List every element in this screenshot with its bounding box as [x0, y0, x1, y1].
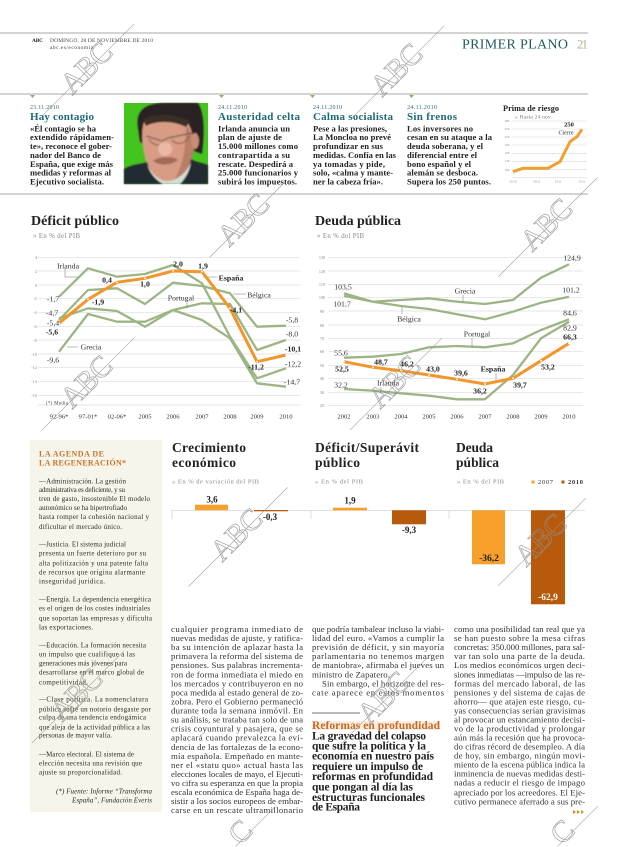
chart: Deuda pública: 101,7 [333, 300, 351, 308]
sidebar: La agenda de la regeneración: administrativa es deficiente, y su [39, 486, 126, 494]
bar chart: Deuda pública 2007 vs 2010: -62,9 [538, 593, 558, 603]
chart: Deuda pública: 84,6 [563, 308, 577, 318]
chart: Déficit público: 2006 [166, 414, 180, 420]
sidebar: La agenda de la regeneración: elección necesita una revisión que [39, 760, 142, 768]
chart: Déficit público: Déficit público [31, 214, 119, 229]
article text column 2: que podría tambalear incluso la viabi- [312, 624, 444, 634]
sidebar: La agenda de la regeneración: —Justicia. El sistema judicial [38, 540, 126, 548]
sidebar: La agenda de la regeneración: alta politización y una patente falta [39, 560, 149, 568]
news item: Calma socialista: La Moncloa no prevé [313, 132, 391, 142]
pull quote: Reformas en profundidad: La gravedad del colapso [312, 730, 426, 742]
sidebar: La agenda de la regeneración: desarrollarse en el marco global de [39, 668, 144, 676]
news item: Sin frenos: 24.11.2010 [407, 105, 437, 111]
bar chart section axis [172, 510, 585, 519]
mini chart: Prima de riesgo: 250 [564, 122, 574, 128]
mini chart: Prima de riesgo: Prima de riesgo [503, 104, 559, 113]
pull quote: Reformas en profundidad [312, 713, 441, 814]
sidebar: La agenda de la regeneración: culpa de una tendencia endogámica [39, 714, 147, 722]
news item: Austeridad celta: Irlanda anuncia un [218, 123, 290, 133]
article text column 1: zobra. Pero el Gobierno permaneció [171, 696, 304, 706]
bar chart: Crecimiento económico: económico [172, 455, 236, 470]
bar chart: Deuda pública 2007 vs 2010 [456, 440, 583, 604]
chart: Deuda pública: 48,7 [374, 358, 388, 366]
chart: Déficit público: Grecia [81, 342, 102, 352]
article text column 1: dencia de las fortalezas de la econo- [171, 742, 303, 752]
chart: Déficit público: -2 [33, 296, 37, 301]
mini chart: Prima de riesgo: 160 [505, 151, 510, 155]
news item: Calma socialista: Calma socialista [313, 111, 394, 123]
pull quote: Reformas en profundidad: Reformas en profundidad [312, 720, 441, 732]
news item: Calma socialista: ner la cabeza fría». [313, 176, 383, 186]
news item: Sin frenos: cesan en su ataque a la [407, 132, 493, 142]
sidebar: La agenda de la regeneración: pública sufre un notorio desgaste por [39, 706, 152, 714]
chart: Deuda pública: 60 [320, 349, 324, 354]
chart: Déficit público: -5,8 [286, 316, 298, 324]
article text column 2: cate aparece en estos momentos [312, 687, 445, 697]
chart: Deuda pública: 40 [320, 376, 324, 381]
article text column 2: Sin embargo, el horizonte del res- [322, 678, 444, 688]
chart: Deuda pública: 43,0 [426, 364, 440, 374]
chart: Déficit público: -8,0 [286, 330, 298, 338]
mini chart: Prima de riesgo: » Hasta 24 nov. [515, 114, 552, 120]
chart: Déficit público: 2005 [138, 414, 152, 420]
chart: Déficit público: -6 [33, 324, 37, 329]
chart: Deuda pública: 80 [320, 323, 324, 328]
sidebar: La agenda de la regeneración: —Clase política. La nomenclatura [38, 696, 149, 704]
article text column 1: elecciones locales de mayo, el Ejecuti- [171, 769, 303, 779]
article text column 3: yas consecuencias serían gravísimas [454, 705, 586, 715]
sidebar: La agenda de la regeneración: —Educación. La formación necesita [38, 642, 147, 650]
chart: Déficit público: 97-01* [79, 414, 97, 420]
news item: Austeridad celta: 15.000 millones como [218, 141, 298, 151]
news item: Austeridad celta: plan de ajuste de [218, 132, 282, 142]
chart: Deuda pública: Bélgica [397, 314, 421, 324]
mini chart: Prima de riesgo [503, 104, 587, 184]
sidebar: La agenda de la regeneración: que aleja de la actividad pública a las [39, 724, 150, 732]
sidebar: La agenda de la regeneración: competitividad. [39, 678, 88, 686]
sidebar: La agenda de la regeneración: autonómico se ha hipertrofiado [39, 504, 128, 512]
bar chart: Deuda pública 2007 vs 2010: » En % del PIB [457, 478, 505, 486]
chart: Deuda pública: 53,2 [541, 362, 555, 372]
chart: Deuda pública: 39,7 [513, 380, 527, 390]
article text column 1: crisis coyuntural y pasajera, que se [171, 724, 303, 734]
sidebar: La agenda de la regeneración: —Marco electoral. El sistema de [38, 750, 134, 758]
bar chart: Déficit/Superávit público: » En % del PIB [315, 478, 364, 486]
bar chart: Crecimiento económico: Crecimiento [172, 440, 246, 455]
bar chart: Deuda pública 2007 vs 2010: Deuda [456, 440, 493, 455]
sidebar: La agenda de la regeneración: —Administración. La gestión [38, 478, 126, 486]
news item: Calma socialista: medidas. Confía en las [313, 150, 397, 160]
chart: Deuda pública: 32,2 [334, 380, 348, 390]
sidebar: La agenda de la regeneración: las exportaciones. [39, 624, 93, 632]
article text column 3: do cifras récord de desempleo. A día [454, 741, 585, 751]
chart: Deuda pública: 2010 [562, 414, 576, 420]
chart: Deuda pública: 2005 [422, 414, 436, 420]
chart: Déficit público: -5,6 [46, 328, 58, 336]
article text column 3: de hoy, sin embargo, ningún movi- [454, 751, 585, 761]
article text column 1: carse en un rescate ultramillonario [171, 805, 304, 815]
news item: Hay contagio: extendido rápidamen- [30, 132, 114, 142]
chart: Déficit público: -4,1 [230, 306, 242, 314]
pull quote: Reformas en profundidad: requiere un impulso de [312, 761, 423, 773]
news item: Hay contagio: Ejecutivo socialista. [30, 176, 104, 186]
chart: Déficit público: 02-06* [108, 414, 126, 420]
chart: Deuda pública: 2007 [478, 414, 492, 420]
news item: Sin frenos: bono español y el [407, 159, 472, 169]
news item: Hay contagio: nador del Banco de [30, 150, 101, 160]
chart: Déficit público: 0,4 [102, 276, 112, 284]
article text column 3: vo de la productividad y prolongar [454, 723, 585, 733]
sidebar: La agenda de la regeneración: generaciones más jóvenes para [39, 660, 128, 668]
news item: Sin frenos [407, 105, 493, 186]
bar chart: Déficit/Superávit público: -9,3 [402, 525, 417, 535]
chart: Deuda pública: 2002 [337, 414, 351, 420]
chart: Déficit público: España [219, 274, 243, 282]
ABC watermark stamps: ABC [362, 350, 427, 415]
ABC watermark stamps: ABC [364, 38, 429, 103]
article text column 1: escala económica de España haga de- [171, 787, 303, 797]
chart: Déficit público: 2008 [223, 414, 237, 420]
sidebar: La agenda de la regeneración: es el origen de los costes industriales [39, 604, 150, 612]
article text column 3: apreciado por los acreedores. El Eje- [454, 787, 585, 797]
news item: Sin frenos: Los inversores no [407, 123, 473, 133]
sidebar: La agenda de la regeneración: dificultar el mercado único. [39, 523, 122, 531]
chart: Déficit público: 0 [35, 283, 37, 288]
news item: Austeridad celta: contrapartida a su [218, 150, 290, 160]
article text column 1: su análisis, se trataba tan solo de una [171, 715, 303, 725]
chart: Déficit público: » En % del PIB [33, 233, 80, 240]
article text column 2 [312, 624, 445, 697]
pull quote: Reformas en profundidad: estructuras funcionales [312, 792, 426, 804]
ABC watermark stamps: ABC [514, 193, 579, 258]
article text column 1: mía española. Empeñado en mante- [171, 751, 303, 761]
article text column 2: previsión de déficit, y sin mayoría [312, 642, 444, 652]
chart: Deuda pública: España [481, 364, 505, 374]
article text column 3: ahorro— que atajen este riesgo, cu- [454, 696, 585, 706]
chart: Déficit público: 92-96* [50, 414, 68, 420]
sidebar: La agenda de la regeneración: un impulso que cualifique a las [39, 650, 135, 658]
chart: Deuda pública: 52,5 [335, 364, 349, 374]
article text column 1: durante toda la semana inmóvil. En [171, 706, 304, 716]
news item: Calma socialista: solo, «calma y mante- [313, 167, 393, 177]
bar chart: Crecimiento económico [172, 440, 288, 522]
article text column 3: nadas a reducir el riesgo de impago [454, 778, 586, 788]
ABC watermark stamps: ABC [44, 663, 109, 728]
article text column 2: lidad del euro. «Vamos a cumplir la [312, 633, 444, 643]
chart: Déficit público: -14 [31, 379, 38, 384]
article text column 1: primavera la reforma del sistema de [171, 651, 303, 661]
news item: Calma socialista [313, 105, 397, 186]
chart: Déficit público: -14,7 [284, 378, 300, 386]
page header: ABC [32, 38, 43, 44]
article text column 1: ba su intención de aplazar hasta la [171, 642, 303, 652]
article text column 3: cutivo permanece aferrado a sus pre- [454, 797, 585, 807]
chart: Déficit público: -12,2 [285, 360, 301, 368]
chart: Déficit público: 1,9 [198, 262, 208, 270]
article text column 1: ner el «statu quo» actual hasta las [171, 760, 304, 770]
article text column 1: aplacará cuando prevalezca la evi- [171, 733, 303, 743]
news item: Hay contagio: Hay contagio [30, 111, 94, 123]
chart: Déficit público: -9,6 [47, 356, 59, 364]
chart: Déficit público: -4 [33, 310, 38, 315]
sidebar: La agenda de la regeneración: España”, Fundación Everis [71, 796, 152, 804]
chart: Déficit público: Portugal [168, 294, 195, 302]
pull quote: Reformas en profundidad: economía en nuestro país [312, 751, 435, 763]
news item: Austeridad celta: 25.000 funcionarios y [218, 167, 299, 177]
chart: Deuda pública: 130 [319, 255, 325, 260]
article text column 1: cualquier programa inmediato de [171, 624, 303, 634]
chart: Deuda pública: 70 [320, 336, 324, 341]
page header: 21 [577, 38, 588, 52]
ABC watermark stamps: ABC [211, 188, 276, 253]
mini chart: Prima de riesgo: Cierre [558, 130, 574, 136]
news item: Austeridad celta: rescate. Despedirá a [218, 159, 294, 169]
chart: Deuda pública: 39,6 [454, 368, 468, 378]
article text column 1: pensiones. Sus palabras incrementa- [171, 660, 303, 670]
chart: Deuda pública: 103,5 [334, 282, 352, 292]
chart: Déficit público: -11,2 [248, 362, 264, 372]
news item: Sin frenos: alemán se desboca. [407, 167, 478, 177]
news item: Calma socialista: profundizar en sus [313, 141, 384, 151]
article text column 3 [454, 624, 586, 807]
bar chart: Deuda pública 2007 vs 2010: -36,2 [479, 554, 499, 564]
chart: Déficit público: -8 [33, 338, 37, 343]
mini chart: Prima de riesgo: 14.11 [554, 180, 562, 184]
chart: Déficit público: 2 [35, 269, 37, 274]
chart: Deuda pública: 36,2 [473, 386, 487, 396]
chart: Déficit público: -10,1 [285, 344, 301, 354]
sidebar: La agenda de la regeneración: LA REGENERACIÓN* [39, 458, 126, 468]
chart: Deuda pública: 101,2 [562, 286, 580, 294]
page header: abc.es/economia [50, 45, 94, 51]
sidebar: La agenda de la regeneración: tren de gasto, insostenible El modelo [39, 495, 150, 503]
chart: Déficit público: (*) Media [46, 402, 69, 406]
bar chart: Crecimiento económico: -0,3 [263, 512, 278, 522]
chart: Déficit público: 2007 [195, 414, 209, 420]
page header [0, 33, 588, 52]
chart: Deuda pública: 20 [320, 403, 324, 408]
chart: Déficit público: -1,9 [92, 298, 104, 306]
chart: Deuda pública: 120 [319, 269, 325, 274]
article text column 1: los mercados y contribuyeron en no [171, 678, 304, 688]
article text column 3: como una posibilidad tan real que ya [454, 624, 585, 634]
sidebar: La agenda de la regeneración: hasta romper la cohesión nacional y [39, 513, 150, 521]
chart: Deuda pública: 82,9 [563, 324, 577, 332]
news item: Hay contagio: medidas y reformas al [30, 167, 112, 177]
article text column 3: aún más la recesión que ha provoca- [454, 732, 585, 742]
chart: Deuda pública: 2003 [366, 414, 380, 420]
page header: DOMINGO, 28 DE NOVIEMBRE DE 2010 [50, 38, 153, 44]
pull quote: Reformas en profundidad: que pongan al día las [312, 782, 414, 794]
chart: Déficit público: -12 [31, 365, 37, 370]
chart: Déficit público: 2010 [279, 414, 293, 420]
ABC watermark stamps: ABC [204, 503, 269, 568]
mini chart: Prima de riesgo: 250 [505, 127, 510, 131]
mini chart: Prima de riesgo: 100 [505, 168, 510, 172]
chart: Deuda pública: Portugal [464, 330, 491, 338]
pull quote: Reformas en profundidad: que sufre la política y la [312, 740, 426, 752]
sidebar: La agenda de la regeneración: LA AGENDA DE [39, 450, 104, 458]
mini chart: Prima de riesgo: 220 [505, 135, 510, 139]
chart: Déficit público: -5,4 [47, 318, 59, 328]
article text column 3: se han puesto sobre la mesa cifras [454, 633, 586, 643]
news item: Calma socialista: ya tomadas y pide, [313, 159, 385, 169]
mini chart: Prima de riesgo: 280 [505, 119, 510, 123]
chart: Deuda pública: 100 [319, 295, 325, 300]
article text column 2: de maniobra», afirmaba el jueves un [312, 660, 445, 670]
ABC watermark stamps: ABC [54, 36, 119, 101]
news item: Calma socialista: Pese a las presiones, [313, 123, 387, 133]
article text column 3: al provocar un estancamiento decisi- [454, 714, 585, 724]
article text column 3: formas del mercado laboral, de las [454, 678, 586, 688]
chart: Deuda pública: 66,3 [563, 332, 577, 342]
bar chart: Déficit/Superávit público [315, 440, 426, 535]
chart: Deuda pública: 110 [319, 282, 325, 287]
article text column 3: var tan solo una parte de la deuda. [454, 651, 585, 661]
news item: Calma socialista: 24.11.2010 [313, 105, 342, 111]
pull quote: Reformas en profundidad: de España [312, 802, 360, 814]
chart: Deuda pública: 55,6 [334, 348, 348, 358]
chart: Déficit público: 4 [35, 255, 38, 260]
chart: Déficit público: 1,0 [140, 280, 150, 288]
mini chart: Prima de riesgo: 190 [505, 143, 510, 147]
chart: Deuda pública: 124,9 [563, 254, 581, 262]
news strip rules [0, 94, 588, 194]
chart: Déficit público: -16 [31, 393, 37, 398]
bar chart: Déficit/Superávit público: Déficit/Superávit [315, 440, 420, 455]
article text column 1: nuevas medidas de ajuste, y ratifica- [171, 633, 303, 643]
news item: Hay contagio: 23.11.2010 [30, 105, 59, 111]
article text column 1: sistir a los socios europeos de embar- [171, 796, 303, 806]
article text column 3: pensiones y del sistema de cajas de [454, 687, 585, 697]
bar chart: Déficit/Superávit público: público [315, 455, 360, 470]
sidebar: La agenda de la regeneración: inseguridad jurídica. [39, 578, 105, 586]
article text column 3: Los medios económicos urgen deci- [454, 660, 585, 670]
article text column 3: siones inmediatas —impulso de las re- [454, 669, 585, 679]
article text column 3: concretas: 350.000 millones, para sal- [454, 642, 585, 652]
article text column 1: ron de forma inmediata el miedo en [171, 669, 304, 679]
news item: Austeridad celta: Austeridad celta [218, 111, 300, 123]
bar chart: Crecimiento económico: » En % de variación del PIB [172, 478, 260, 486]
news item: Sin frenos: Sin frenos [407, 111, 458, 123]
chart: Deuda pública: 46,2 [400, 360, 414, 368]
article text column 1: vo cifra su esperanza en que la propia [171, 778, 303, 788]
article text column 1 [171, 624, 304, 815]
chart: Deuda pública: 50 [320, 363, 324, 368]
mini chart: Prima de riesgo: 08.11 [533, 180, 541, 184]
chart: Deuda pública: 2004 [394, 414, 408, 420]
chart: Deuda pública: 2008 [506, 414, 520, 420]
news item: Austeridad celta: 24.11.2010 [218, 105, 247, 111]
chart: Deuda pública: 2009 [534, 414, 548, 420]
photo: portrait of politician on green background [124, 103, 208, 184]
chart: Déficit público: Bélgica [247, 290, 271, 300]
chart: Déficit público: Irlanda [57, 262, 80, 270]
chart: Deuda pública: Irlanda [377, 378, 400, 388]
chart: Déficit público [31, 214, 301, 420]
pull quote: Reformas en profundidad: reformas en profundidad [312, 771, 434, 783]
bar chart: Deuda pública 2007 vs 2010: 2007 [538, 479, 554, 486]
chart: Déficit público: -1,7 [47, 294, 59, 304]
chart: Déficit público: 2009 [250, 414, 264, 420]
sidebar: La agenda de la regeneración: que soportan las empresas y dificulta [39, 614, 153, 622]
news item: Austeridad celta: subirá los impuestos. [218, 176, 297, 186]
chart: Deuda pública: » En % del PIB [317, 233, 364, 240]
article text column 3: miento de la escena pública indica la [454, 759, 585, 769]
ABC watermark stamps: ABC [351, 666, 416, 731]
news item: Hay contagio [30, 105, 114, 186]
sidebar: La agenda de la regeneración: personas de mayor valía. [39, 732, 112, 740]
sidebar: La agenda de la regeneración: ajuste su proporcionalidad. [39, 768, 122, 776]
page header: PRIMER PLANO [462, 38, 568, 52]
news item: Sin frenos: diferencial entre el [407, 150, 478, 160]
mini chart: Prima de riesgo: 24.11 [578, 180, 586, 184]
bar chart: Déficit/Superávit público: 1,9 [344, 496, 356, 506]
ABC watermark stamps: ABC [508, 508, 573, 573]
news item: Austeridad celta [218, 105, 300, 186]
chart: Deuda pública: Grecia [455, 286, 476, 296]
chart: Deuda pública: 2006 [450, 414, 464, 420]
sidebar: La agenda de la regeneración: (*) Fuente: Informe “Transforma [56, 788, 152, 796]
mini chart: Prima de riesgo: 130 [505, 159, 510, 163]
news item: Sin frenos: deuda soberana, y el [407, 141, 484, 151]
icon: continuation arrows [573, 810, 584, 814]
news item: Sin frenos: Supera los 250 puntos. [407, 176, 491, 186]
chart: Deuda pública [315, 214, 583, 420]
ABC watermark stamps: ABC [54, 350, 119, 415]
article text column 3: inminencia de nuevas medidas desti- [454, 768, 585, 778]
news item: Hay contagio: te», reconoce el gober- [30, 141, 112, 151]
bar chart: Deuda pública 2007 vs 2010: 2010 [568, 479, 583, 486]
article text column 2: parlamentaria no tenemos margen [312, 651, 445, 661]
news item: Hay contagio: España, que exige más [30, 159, 114, 169]
article text column 2: ministro de Zapatero. [312, 669, 390, 679]
sidebar: La agenda de la regeneración: de recursos que origina alarmante [39, 568, 145, 576]
mini chart: Prima de riesgo: 26.10 [509, 180, 517, 184]
bar chart: Deuda pública 2007 vs 2010: pública [456, 455, 499, 470]
chart: Déficit público: 2,0 [173, 260, 183, 268]
sidebar: La agenda de la regeneración: —Energía. La dependencia energética [38, 596, 152, 604]
chart: Deuda pública: 30 [320, 390, 324, 395]
chart: Déficit público: -10 [31, 352, 37, 357]
sidebar: La agenda de la regeneración [30, 440, 162, 812]
chart: Deuda pública: 90 [320, 309, 324, 314]
article text column 1: poca medida al estado general de zo- [171, 687, 303, 697]
chart: Déficit público: -4,7 [46, 308, 58, 318]
bar chart: Crecimiento económico: 3,6 [206, 494, 218, 504]
sidebar: La agenda de la regeneración: presenta un fuerte deterioro por su [39, 550, 146, 558]
news item: Hay contagio: «Él contagio se ha [30, 123, 97, 133]
chart: Deuda pública: Deuda pública [315, 214, 401, 229]
